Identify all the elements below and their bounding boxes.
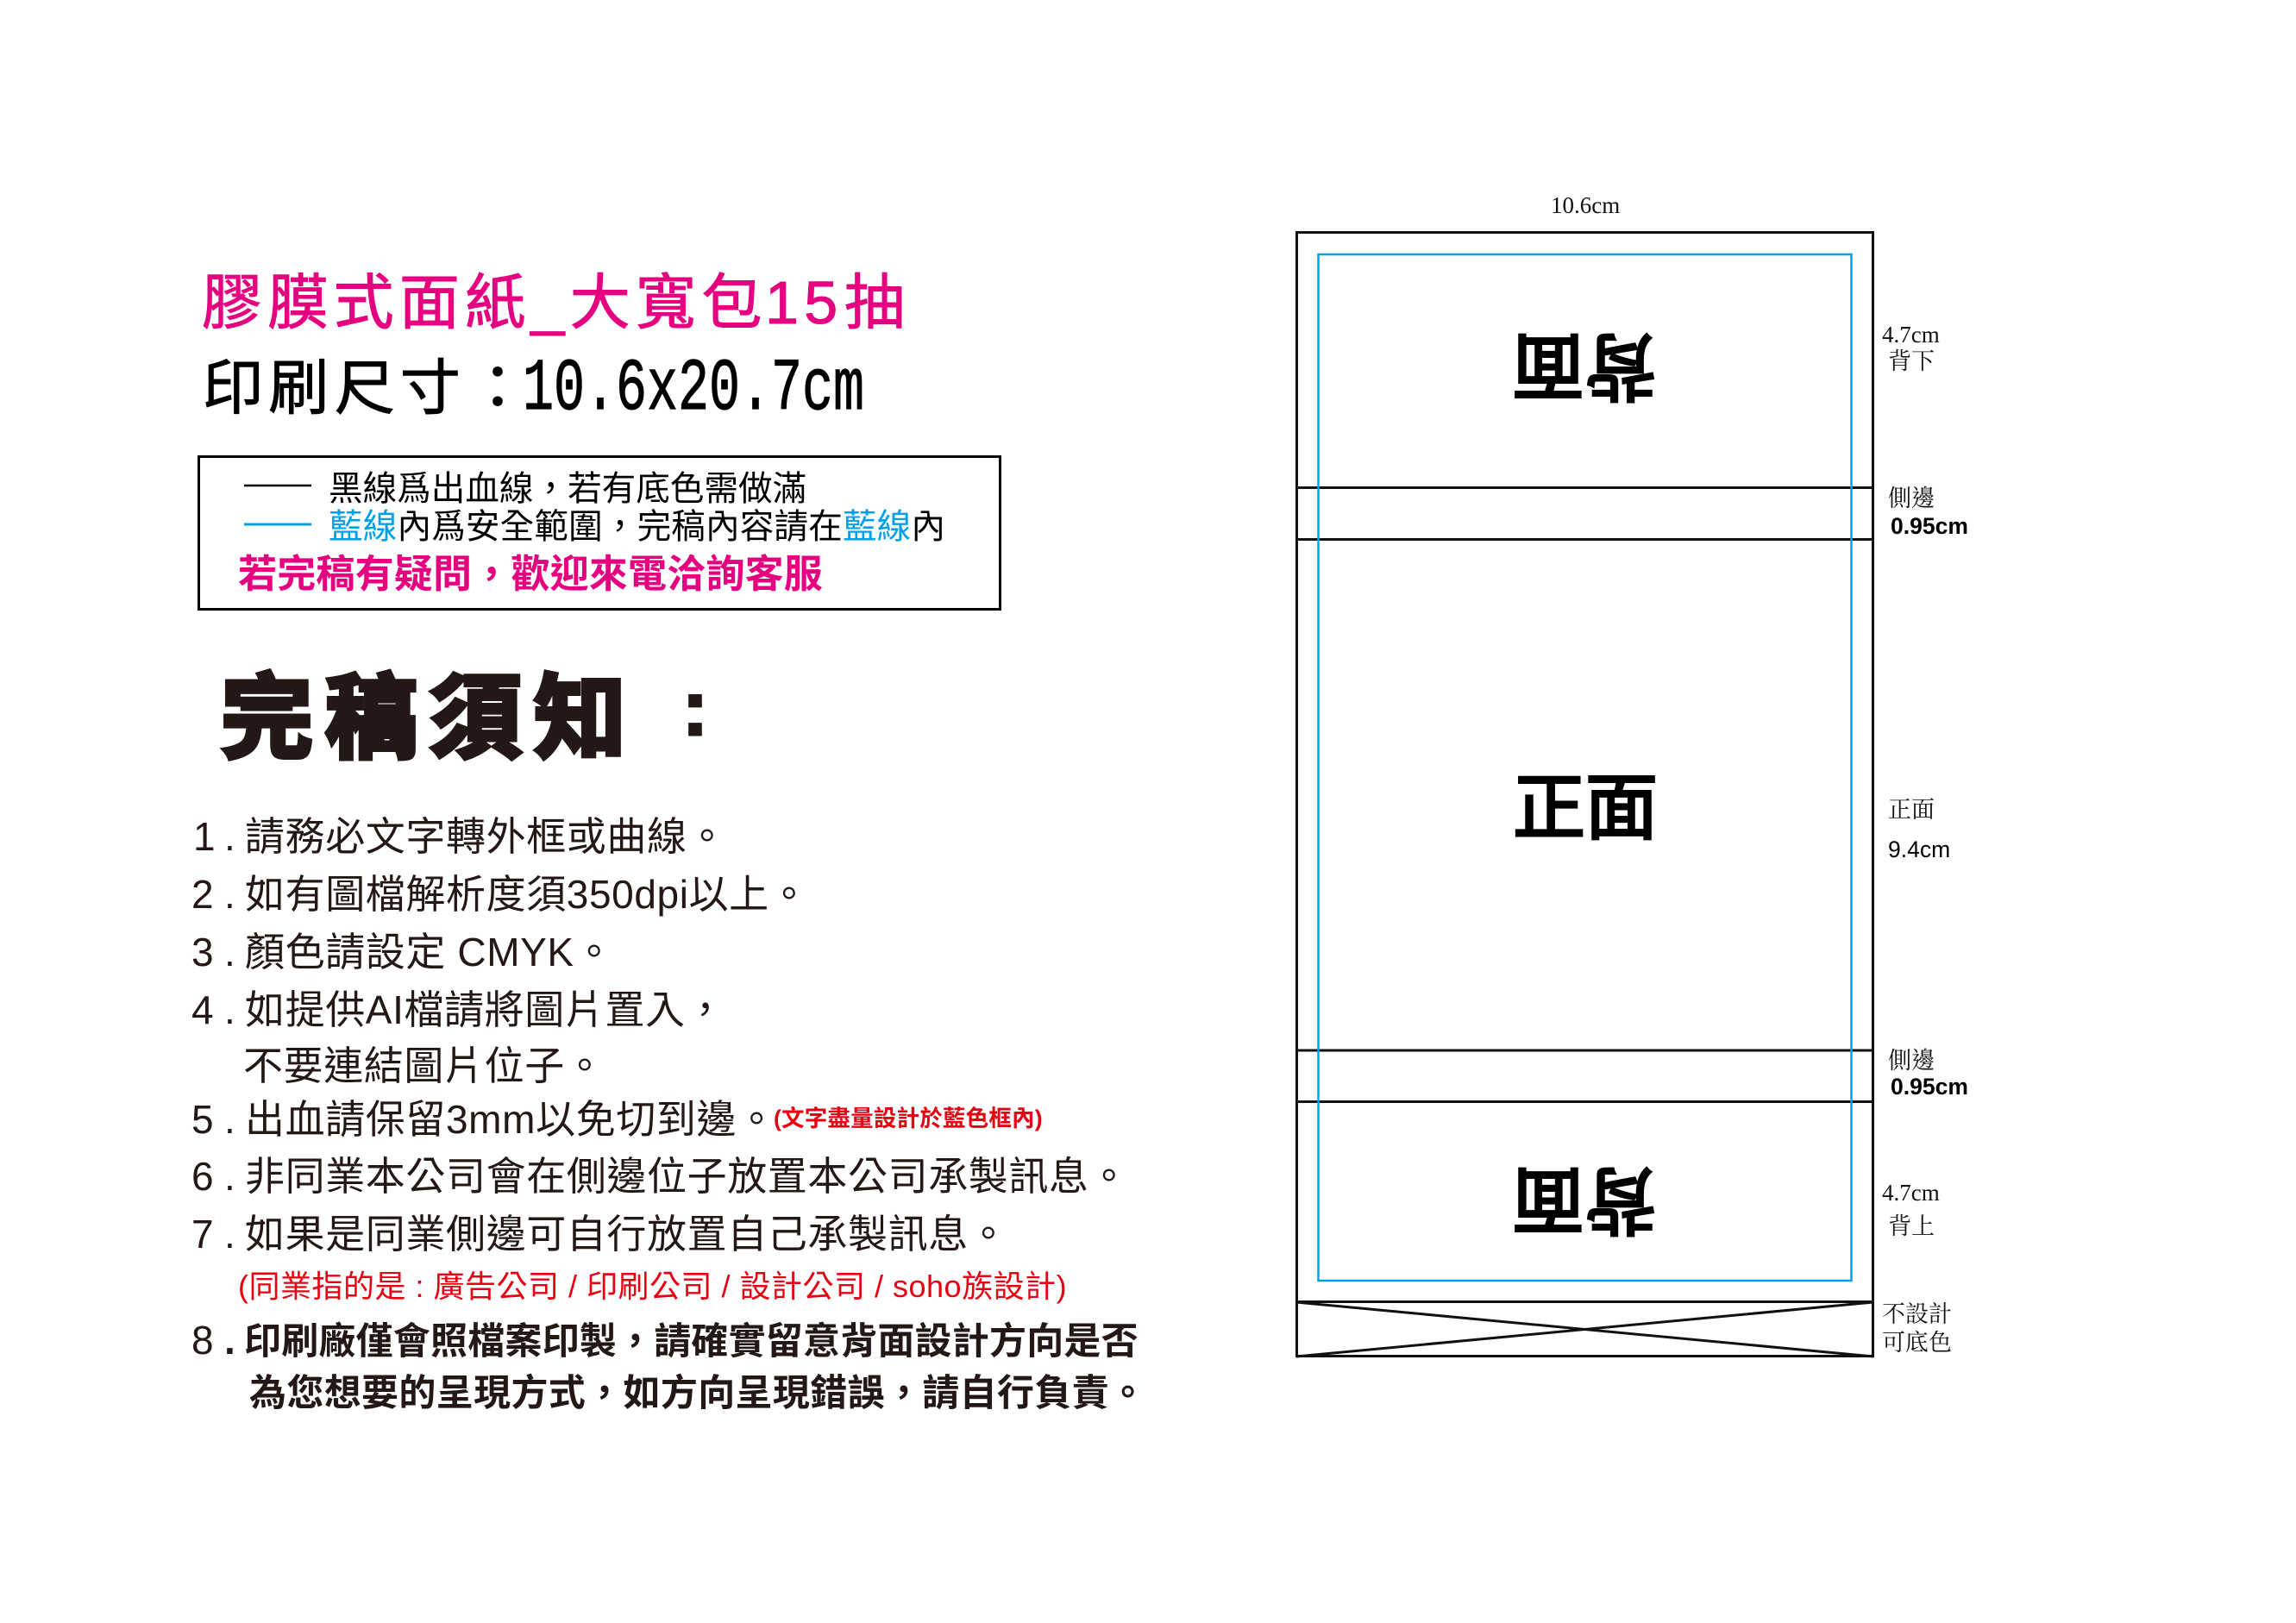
note 7: . xyxy=(224,1212,235,1256)
note 5: 5 xyxy=(191,1097,214,1142)
label: front panel: 正面 xyxy=(1513,768,1658,849)
note 8: 8 xyxy=(191,1318,214,1363)
title: 膠膜式面紙_大寬包 xyxy=(202,269,768,336)
note 2: 2 xyxy=(191,872,214,917)
note 7: 7 xyxy=(191,1212,214,1256)
dimension: front xyxy=(1888,797,1950,862)
dimension: back upper: 背上 xyxy=(1888,1213,1935,1239)
note 2: . xyxy=(224,872,235,917)
contact note: 若完稿有疑問，歡迎來電洽詢客服 xyxy=(238,552,823,596)
dimension: back upper: 4.7cm xyxy=(1882,1180,1940,1206)
note 8: 印刷廠僅會照檔案印製，請確實留意背面設計方向是否 xyxy=(244,1321,1139,1363)
note: no design area xyxy=(1882,1301,1952,1356)
print size heading xyxy=(203,349,864,432)
notes list xyxy=(191,814,1146,1414)
dimension: side top: 側邊 xyxy=(1888,486,1935,511)
note 6: 6 xyxy=(191,1154,214,1199)
note 6: . xyxy=(224,1154,235,1199)
print size heading: 10.6x20.7cm xyxy=(523,349,864,432)
note 4: 如提供AI檔請將圖片置入， xyxy=(245,987,725,1032)
title: 15 xyxy=(765,269,843,336)
note 7: 如果是同業側邊可自行放置自己承製訊息。 xyxy=(245,1212,1008,1256)
note 5: . xyxy=(224,1097,235,1142)
panel: line legend and contact note xyxy=(198,457,1001,609)
note 7 red remark: (同業指的是 : 廣告公司 / 印刷公司 / 設計公司 / soho族設計) xyxy=(238,1269,1067,1304)
title: 抽 xyxy=(844,269,910,336)
note: no design area: 不設計 xyxy=(1882,1301,1952,1327)
dimension: back lower xyxy=(1882,322,1940,374)
legend: black line: 黑線爲出血線，若有底色需做滿 xyxy=(329,470,806,508)
dimension: front: 正面 xyxy=(1888,797,1935,823)
heading: notes: : xyxy=(682,666,708,752)
panel: tissue pack diagram xyxy=(1296,233,1873,1357)
note 4: . xyxy=(224,987,235,1032)
print size heading: ： xyxy=(467,354,533,422)
note 8: 為您想要的呈現方式，如方向呈現錯誤，請自行負責。 xyxy=(249,1373,1146,1414)
outer bleed frame xyxy=(1296,233,1873,1357)
note 5 red remark: (文字盡量設計於藍色框內) xyxy=(774,1106,1043,1131)
dimension: back lower: 背下 xyxy=(1888,348,1935,374)
note 3: 顏色請設定 CMYK。 xyxy=(245,930,614,974)
note 1: 1 xyxy=(193,814,216,859)
note 5: 出血請保留3mm以免切到邊。 xyxy=(245,1097,777,1142)
dimension: back lower: 4.7cm xyxy=(1882,322,1940,348)
note 3: 3 xyxy=(191,930,214,974)
dimension: side bottom: 側邊 xyxy=(1888,1048,1935,1074)
note: no design area: 可底色 xyxy=(1882,1330,1952,1356)
note 3: . xyxy=(224,930,235,974)
dimension: side bottom xyxy=(1888,1048,1968,1100)
heading: notes: 完稿須知 xyxy=(221,667,638,770)
legend: blue line: 藍線內爲安全範圍，完稿內容請在藍線內 xyxy=(329,508,945,546)
note 8: . xyxy=(224,1318,235,1363)
note 4: 不要連結圖片位子。 xyxy=(243,1043,605,1088)
dimension: back upper xyxy=(1882,1180,1940,1239)
label: upside-down back panel bottom: 背面 xyxy=(1512,1159,1657,1240)
dimension: side top xyxy=(1888,486,1968,539)
dimension: side bottom: 0.95cm xyxy=(1891,1074,1968,1100)
dimension: width: 10.6cm xyxy=(1551,192,1620,218)
print size heading: 印刷尺寸 xyxy=(203,354,466,422)
blue safe area xyxy=(1318,254,1851,1281)
note 6: 非同業本公司會在側邊位子放置本公司承製訊息。 xyxy=(245,1154,1129,1199)
note 4: 4 xyxy=(191,987,214,1032)
note 2: 如有圖檔解析度須350dpi以上。 xyxy=(245,872,809,917)
label: upside-down back panel top: 背面 xyxy=(1512,325,1657,406)
note 1: . xyxy=(224,814,235,859)
dimension: side top: 0.95cm xyxy=(1891,513,1968,539)
dimension: front: 9.4cm xyxy=(1888,837,1950,862)
note 1: 請務必文字轉外框或曲線。 xyxy=(245,814,727,859)
